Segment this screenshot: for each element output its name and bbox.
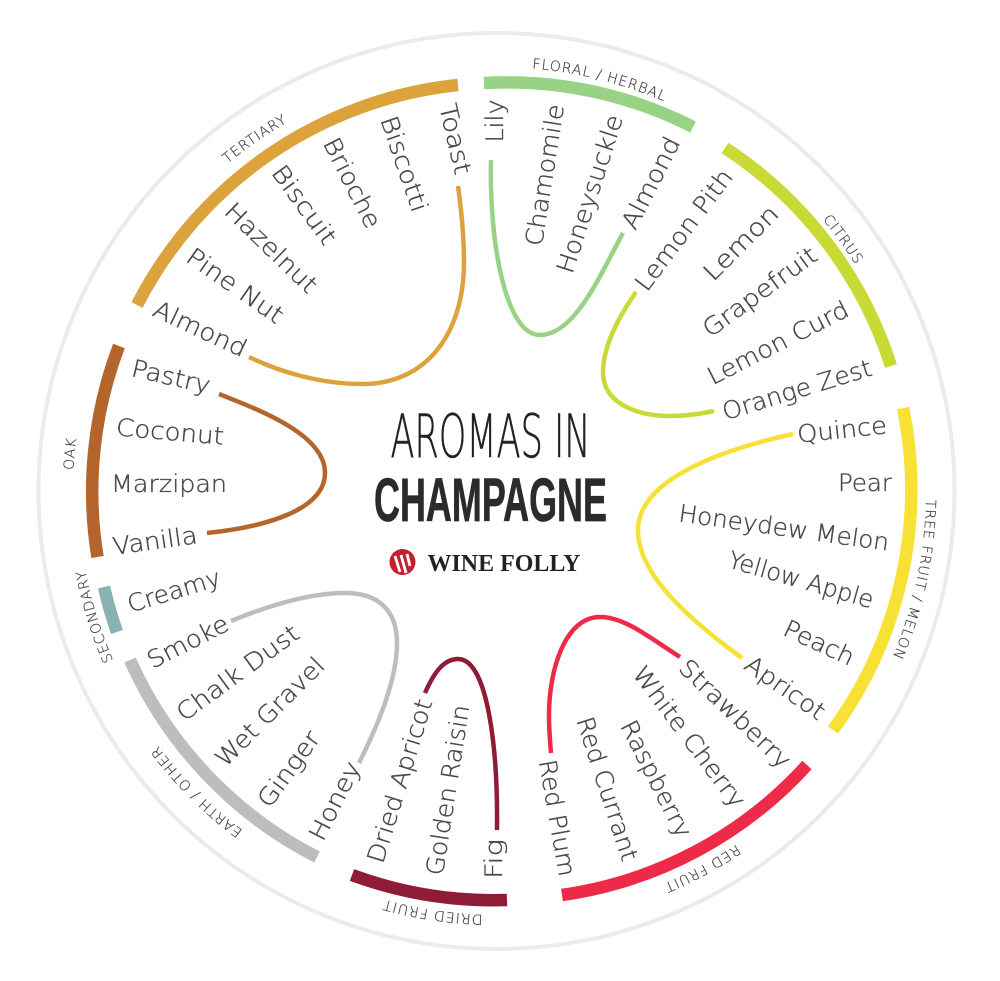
panel: tertiary: Pine Nut [181, 242, 289, 330]
panel: secondary: Creamy [124, 564, 224, 618]
panel: floral / herbal: Lily [481, 99, 509, 143]
panel: red fruit [533, 614, 812, 902]
panel: tertiary [132, 78, 477, 386]
panel: red fruit: Raspberry [614, 716, 698, 842]
panel: oak: Pastry [129, 354, 213, 400]
panel: floral / herbal: FLORAL / HERBAL [534, 58, 664, 101]
panel: citrus: Lemon Pith [629, 164, 739, 296]
title [374, 402, 607, 534]
panel: earth / other: Smoke [142, 610, 234, 674]
panel: earth / other: Ginger [252, 725, 326, 813]
panel: citrus: Grapefruit [697, 241, 823, 343]
panel: tree fruit / melon [636, 406, 936, 734]
title: CHAMPAGNE [374, 466, 607, 534]
panel: floral / herbal: Chamomile [520, 102, 570, 248]
panel: citrus [600, 142, 897, 426]
panel: tree fruit / melon: Peach [779, 614, 859, 672]
panel: floral / herbal: Almond [616, 132, 686, 234]
panel: tree fruit / melon: Quince [796, 411, 888, 449]
panel: oak [63, 344, 328, 561]
title: AROMAS IN [390, 402, 590, 472]
panel: red fruit: Red Currant [571, 713, 643, 865]
panel: secondary: SECONDARY [75, 572, 112, 663]
panel: red fruit: White Cherry [627, 661, 751, 813]
panel: tree fruit / melon: Honeydew Melon [677, 499, 891, 557]
panel: earth / other: Honey [303, 757, 367, 845]
logo: Wine Folly: WINE FOLLY [428, 551, 580, 577]
panel: tertiary: Almond [149, 295, 251, 363]
panel: dried fruit: DRIED FRUIT [382, 900, 482, 926]
panel: oak: Coconut [115, 413, 225, 451]
panel: tree fruit / melon: Pear [838, 469, 892, 497]
panel: dried fruit: Golden Raisin [421, 703, 475, 877]
panel: dried fruit [350, 656, 508, 926]
panel: citrus: Lemon [698, 200, 784, 286]
panel: tertiary: Biscotti [374, 112, 434, 216]
panel: red fruit: Strawberry [673, 654, 797, 774]
panel: citrus: Lemon Curd [703, 295, 853, 391]
panel: oak: Marzipan [111, 470, 227, 498]
panel: tertiary: Biscuit [266, 160, 342, 250]
panel: floral / herbal [481, 58, 696, 338]
panel: floral / herbal: Honeysuckle [551, 111, 629, 277]
panel: oak: OAK [63, 438, 76, 469]
panel: tertiary: Toast [433, 101, 477, 177]
panel: earth / other: Wet Gravel [210, 652, 330, 772]
panel: citrus: Orange Zest [719, 354, 875, 426]
panel: earth / other [124, 590, 400, 862]
panel: tertiary: Hazelnut [219, 197, 323, 299]
panel: earth / other: Chalk Dust [171, 619, 305, 727]
panel: red fruit: RED FRUIT [667, 845, 741, 893]
panel: tertiary: TERTIARY [221, 114, 284, 162]
panel: dried fruit: Fig [480, 839, 508, 879]
panel: citrus: CITRUS [824, 215, 863, 263]
panel: tree fruit / melon: Apricot [739, 650, 831, 726]
panel: tree fruit / melon: TREE FRUIT / MELON [894, 500, 936, 659]
panel: tertiary: Brioche [317, 133, 387, 233]
panel: tree fruit / melon: Yellow Apple [725, 546, 877, 614]
panel: red fruit: Red Plum [533, 757, 581, 879]
panel: oak: Vanilla [111, 521, 199, 561]
panel: dried fruit: Dried Apricot [362, 696, 438, 866]
panel: earth / other: EARTH / OTHER [152, 746, 242, 838]
panel: secondary [75, 564, 224, 663]
